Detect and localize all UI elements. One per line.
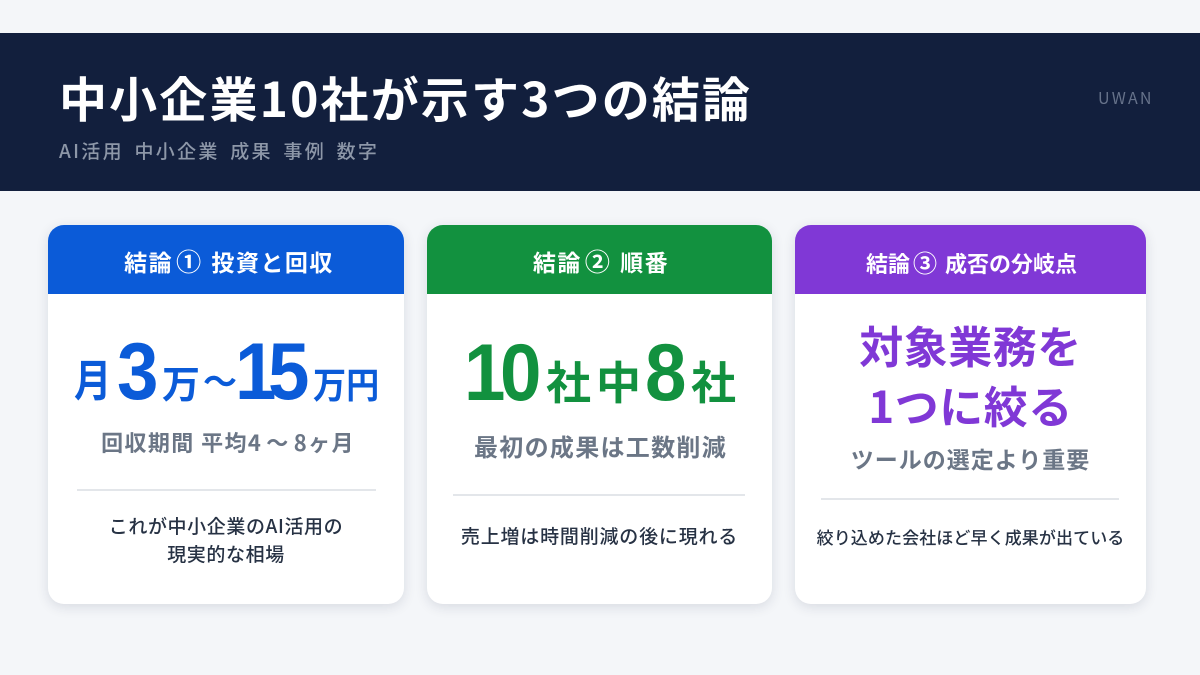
card 1 key figure: 万 <box>162 354 200 409</box>
card 1 key figure: 月 <box>74 345 111 409</box>
card 1 subtext: 回収期間 平均4～8ヶ月 <box>101 426 355 458</box>
card 1 key figure: 5 <box>268 327 309 417</box>
subtitle tags: AI活用 中小企業 成果 事例 数字 <box>59 137 379 164</box>
card 2 key figure: 社 <box>691 347 736 412</box>
card 1 note <box>109 512 343 567</box>
card 3 heading: 結論③ 成否の分岐点 <box>866 244 1077 279</box>
panel: conclusion 2 <box>427 225 772 604</box>
card 3 key message: 対象業務を <box>859 312 1082 376</box>
card 2 key figure: 中 <box>596 347 641 412</box>
card 1 note: 現実的な相場 <box>167 540 285 567</box>
card 2 key figure: 0 <box>500 328 541 418</box>
card 1 heading: 結論① 投資と回収 <box>124 243 334 279</box>
card 3 subtext: ツールの選定より重要 <box>851 441 1090 475</box>
panel: conclusion 1 <box>48 225 404 604</box>
card 1 key figure <box>74 327 379 417</box>
brand label: UWAN <box>1098 85 1154 109</box>
panel: conclusion 3 <box>795 225 1146 604</box>
card 2 subtext: 最初の成果は工数削減 <box>474 428 727 463</box>
card 2 key figure: 社 <box>546 347 591 412</box>
card 2 note: 売上増は時間削減の後に現れる <box>461 522 738 549</box>
card 2 key figure: 1 <box>464 328 505 418</box>
card 2 key figure <box>464 328 736 418</box>
card 1 heading <box>48 225 404 294</box>
card 1 note: これが中小企業のAI活用の <box>109 512 343 539</box>
card 3 note: 絞り込めた会社ほど早く成果が出ている <box>817 524 1124 549</box>
card 3 key message: 1つに絞る <box>868 372 1073 436</box>
card 1 key figure: 万円 <box>313 357 379 409</box>
card 1 key figure: 1 <box>235 327 276 417</box>
title: 中小企業10社が示す3つの結論 <box>59 61 752 131</box>
card 3 key message <box>859 312 1082 436</box>
header band <box>0 33 1200 191</box>
card 1 key figure: ～ <box>203 355 237 404</box>
card 3 heading <box>795 225 1146 294</box>
card 1 key figure: 3 <box>117 327 158 417</box>
card 2 heading: 結論② 順番 <box>533 243 669 279</box>
card 2 heading <box>427 225 772 294</box>
card 2 key figure: 8 <box>645 328 686 418</box>
